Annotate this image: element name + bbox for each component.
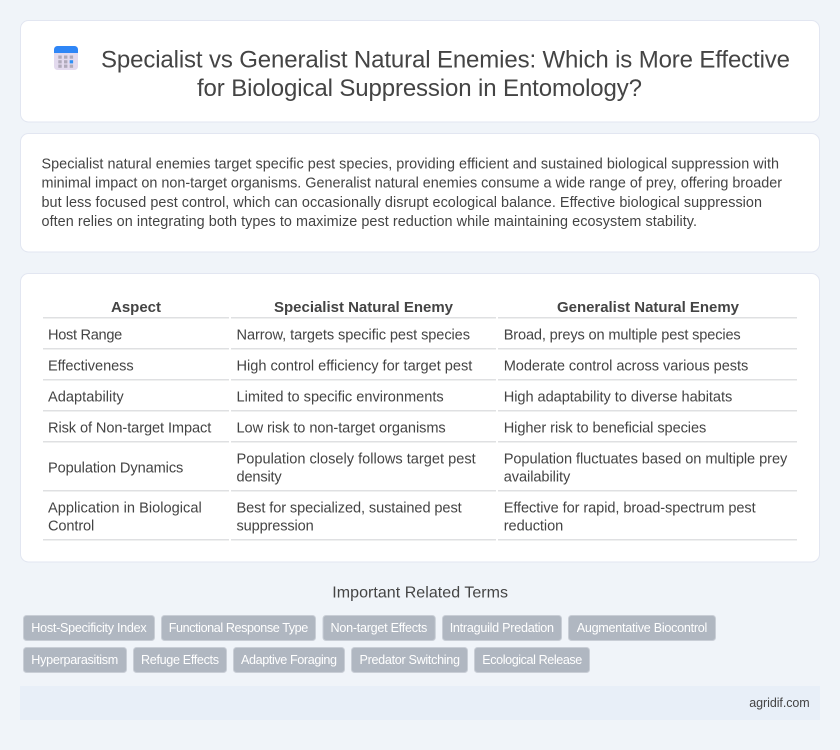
tag (134, 648, 226, 672)
panel: comparison table (20, 274, 820, 562)
row: application in biological control (48, 500, 756, 534)
row: application in biological control: suppression (236, 518, 314, 534)
row: host range: Narrow, targets specific pest species (236, 327, 470, 343)
table header: Aspect (111, 299, 161, 316)
row: host range (48, 327, 741, 343)
table header: Specialist Natural Enemy (274, 299, 454, 316)
tag: Refuge Effects (141, 653, 219, 667)
tag (24, 648, 126, 672)
heading: important related terms: Important Related Terms (332, 585, 508, 602)
summary text: but less focused pest control, which can occasionally disrupt ecological balance. Effective biological suppression (42, 195, 762, 211)
row: application in biological control: Application in Biological (48, 500, 202, 516)
row: application in biological control: Best for specialized, sustained pest (236, 500, 462, 516)
tag: Augmentative Biocontrol (577, 621, 707, 635)
row: effectiveness: High control efficiency for target pest (236, 358, 472, 374)
row: population dynamics: Population Dynamics (48, 460, 183, 476)
tag: Functional Response Type (169, 621, 308, 635)
row: adaptability (48, 389, 732, 405)
tag (234, 648, 344, 672)
row: effectiveness: Effectiveness (48, 358, 134, 374)
tag: Host-Specificity Index (31, 621, 147, 635)
tag (24, 616, 154, 640)
tag (474, 648, 590, 672)
row: effectiveness (48, 358, 748, 374)
tags: related terms (24, 616, 716, 672)
row: host range: Host Range (48, 327, 122, 343)
row: risk of non-target impact: Higher risk to beneficial species (504, 420, 706, 436)
row: adaptability: Limited to specific environments (236, 389, 444, 405)
summary text: often relies on integrating both types to maximize pest reduction while maintaining ecosystem stability. (42, 214, 697, 230)
icon: calendar (54, 46, 78, 70)
row: population dynamics: Population closely follows target pest (236, 451, 476, 467)
tag (442, 616, 562, 640)
row: population dynamics (48, 451, 788, 485)
row: adaptability: High adaptability to diverse habitats (504, 389, 732, 405)
table header (111, 299, 740, 316)
row: host range: Broad, preys on multiple pest species (504, 327, 741, 343)
row: application in biological control: reduction (504, 518, 563, 534)
title: Specialist vs Generalist Natural Enemies: Which is More Effective (101, 46, 790, 74)
row: risk of non-target impact: Low risk to non-target organisms (236, 420, 446, 436)
tag: Intraguild Predation (450, 621, 554, 635)
tag (162, 616, 316, 640)
summary text: minimal impact on non-target organisms. Generalist natural enemies consume a wide range of prey, offering broader (42, 176, 782, 192)
row: adaptability: Adaptability (48, 389, 124, 405)
table header: Generalist Natural Enemy (557, 299, 740, 316)
tag: Predator Switching (360, 653, 460, 667)
row: risk of non-target impact: Risk of Non-target Impact (48, 420, 211, 436)
title: for Biological Suppression in Entomology? (197, 75, 642, 102)
panel: summary (20, 134, 820, 252)
title (101, 46, 790, 102)
row: application in biological control: Control (48, 518, 94, 534)
panel: header (20, 20, 820, 122)
tag (352, 648, 468, 672)
tag: Adaptive Foraging (241, 653, 337, 667)
tag (568, 616, 716, 640)
row: population dynamics: availability (504, 469, 571, 485)
footer (20, 686, 820, 720)
summary text (42, 156, 782, 230)
tag (323, 616, 435, 640)
row: population dynamics: density (236, 469, 282, 485)
footer: agridif.com (749, 696, 810, 710)
tag: Ecological Release (482, 653, 582, 667)
summary text: Specialist natural enemies target specific pest species, providing efficient and sustained biological suppression with (42, 156, 779, 172)
row: risk of non-target impact (48, 420, 706, 436)
row: population dynamics: Population fluctuates based on multiple prey (504, 451, 788, 467)
row: effectiveness: Moderate control across various pests (504, 358, 748, 374)
tag: Non-target Effects (330, 621, 427, 635)
row: application in biological control: Effective for rapid, broad-spectrum pest (504, 500, 756, 516)
tag: Hyperparasitism (31, 653, 118, 667)
